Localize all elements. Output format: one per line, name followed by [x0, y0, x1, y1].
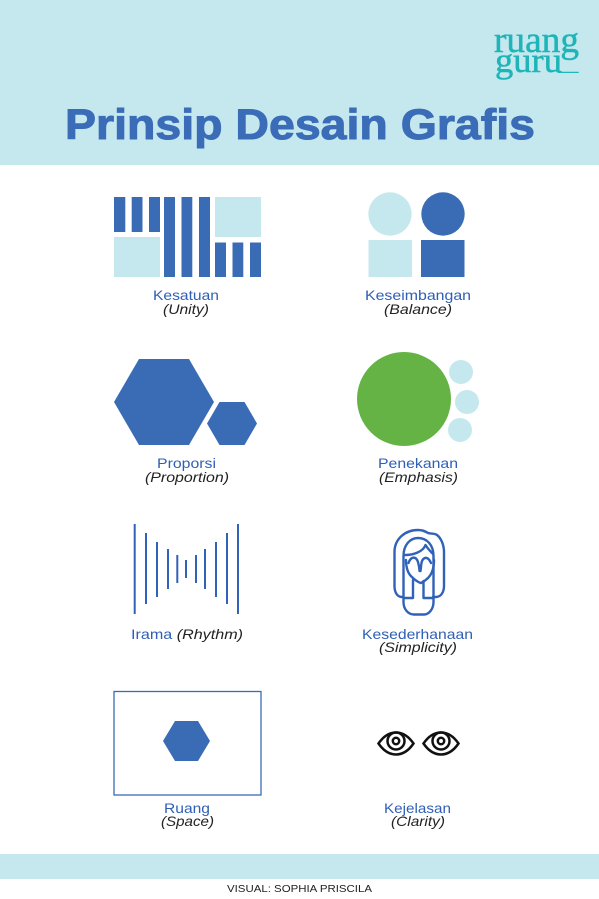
panel: emphasis	[357, 352, 479, 485]
logo: ruangguru	[494, 20, 579, 80]
icon: hexagons	[114, 359, 257, 445]
title: Prinsip Desain Grafis	[65, 101, 535, 149]
neck and inner hair bottom	[404, 580, 434, 598]
panel: clarity	[378, 732, 458, 829]
logo: ruangguru: ruang	[494, 20, 579, 61]
label: Emphasis: (Emphasis)	[379, 469, 458, 485]
lower hair	[404, 598, 434, 614]
label: Balance: (Balance)	[384, 301, 452, 317]
label: Proporsi: Proporsi	[157, 455, 216, 471]
label: Kejelasan: Kejelasan	[384, 800, 451, 816]
panel: balance	[365, 192, 471, 317]
label: Ruang: Ruang	[164, 800, 210, 816]
panel: space	[114, 692, 261, 829]
footer band	[0, 854, 599, 879]
icon: space frame	[114, 692, 261, 795]
icon: unity blocks	[114, 197, 261, 277]
panel: simplicity	[362, 530, 473, 655]
icon: rhythm lines	[135, 524, 238, 614]
label: Simplicity: (Simplicity)	[379, 639, 457, 655]
panel: proportion	[114, 359, 257, 485]
label: Penekanan: Penekanan	[378, 455, 458, 471]
label: Kesederhanaan: Kesederhanaan	[362, 626, 473, 642]
inner hair	[404, 538, 434, 597]
icon: face	[394, 530, 444, 614]
fringe	[405, 545, 433, 555]
outer hair	[394, 530, 444, 597]
logo: ruangguru: guru	[495, 41, 562, 80]
label: Proportion: (Proportion)	[145, 469, 229, 485]
header band	[0, 0, 599, 165]
label: Irama (Rhythm): Irama (Rhythm)	[131, 626, 243, 642]
icon: balance shapes	[368, 192, 465, 277]
face outline	[406, 560, 434, 583]
label: Unity: (Unity)	[163, 301, 209, 317]
icon: emphasis circles	[357, 352, 479, 446]
panel: unity	[114, 197, 261, 317]
label: Keseimbangan: Keseimbangan	[365, 287, 471, 303]
label: Space: (Space)	[161, 813, 214, 829]
brows and nose	[408, 558, 431, 571]
label: Kesatuan: Kesatuan	[153, 287, 219, 303]
label: Clarity: (Clarity)	[391, 813, 445, 829]
credit: VISUAL: SOPHIA PRISCILA	[227, 883, 372, 895]
panel: rhythm	[131, 524, 243, 642]
icon: eyes	[378, 732, 458, 754]
